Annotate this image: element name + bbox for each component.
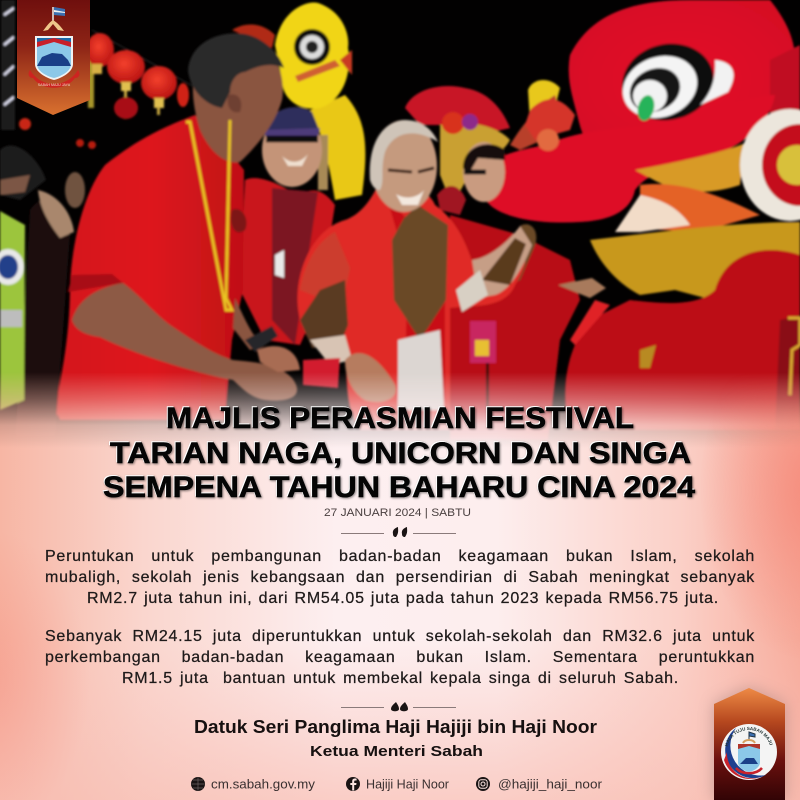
icon: anniversary roundel logo: HALA TUJU SABAH MAJU: [724, 726, 773, 746]
lion: big red head: [483, 0, 800, 302]
paragraph 2: perkembangan badan-badan keagamaan bukan Islam. Sementara peruntukkan: [45, 649, 755, 666]
icon: instagram: [476, 777, 490, 791]
lion: yellow: [232, 3, 365, 200]
date line: 27 JANUARI 2024 | SABTU: [324, 507, 471, 519]
icon: state coat of arms shield: SABAH MAJU JAYA: [38, 83, 71, 87]
person: centre man: [297, 120, 532, 430]
title: TARIAN NAGA, UNICORN DAN SINGA: [110, 437, 691, 470]
paragraph 1: [45, 548, 755, 607]
lion: lower red body: [565, 250, 800, 430]
paragraph 1: Peruntukan untuk pembangunan badan-badan keagamaan bukan Islam, sekolah: [45, 548, 755, 565]
title: MAJLIS PERASMIAN FESTIVAL: [166, 402, 634, 435]
social footer: @hajiji_haji_noor: [498, 778, 602, 792]
person: left security officer: [0, 145, 85, 440]
lion: background red and gold: [405, 80, 565, 215]
icon: state flag: [43, 7, 65, 31]
pale paper background fading over the photo: [0, 374, 800, 800]
title: SEMPENA TAHUN BAHARU CINA 2024: [103, 471, 695, 504]
icon: website globe: [191, 777, 205, 791]
paragraph 2: [45, 628, 755, 687]
bottom-right logo banner: [714, 688, 785, 800]
person: left man in red shirt with lanyard: [55, 33, 300, 420]
social footer: Hajiji Haji Noor: [366, 778, 449, 792]
lanterns: [1, 0, 200, 149]
speaker name and role: Datuk Seri Panglima Haji Hajiji bin Haji Noor: [194, 717, 597, 737]
paragraph 2: Sebanyak RM24.15 juta diperuntukkan untuk sekolah-sekolah dan RM32.6 juta untuk: [45, 628, 755, 645]
social footer: cm.sabah.gov.my: [211, 778, 316, 792]
person: man in cap: [240, 107, 335, 345]
icon: facebook: [346, 777, 360, 791]
speaker name and role: Ketua Menteri Sabah: [310, 743, 483, 760]
paragraph 2: RM1.5 juta bantuan untuk membekal kepala singa di seluruh Sabah.: [122, 670, 679, 687]
top-left crest banner: [17, 0, 90, 115]
paragraph 1: mubaligh, sekolah jenis kebangsaan dan persendirian di Sabah meningkat sebanyak: [45, 569, 755, 586]
bottom-right logo banner shadow: [714, 688, 785, 800]
person: man in red at right: [450, 142, 606, 440]
paragraph 1: RM2.7 juta tahun ini, dari RM54.05 juta pada tahun 2023 kepada RM56.75 juta.: [87, 590, 719, 607]
